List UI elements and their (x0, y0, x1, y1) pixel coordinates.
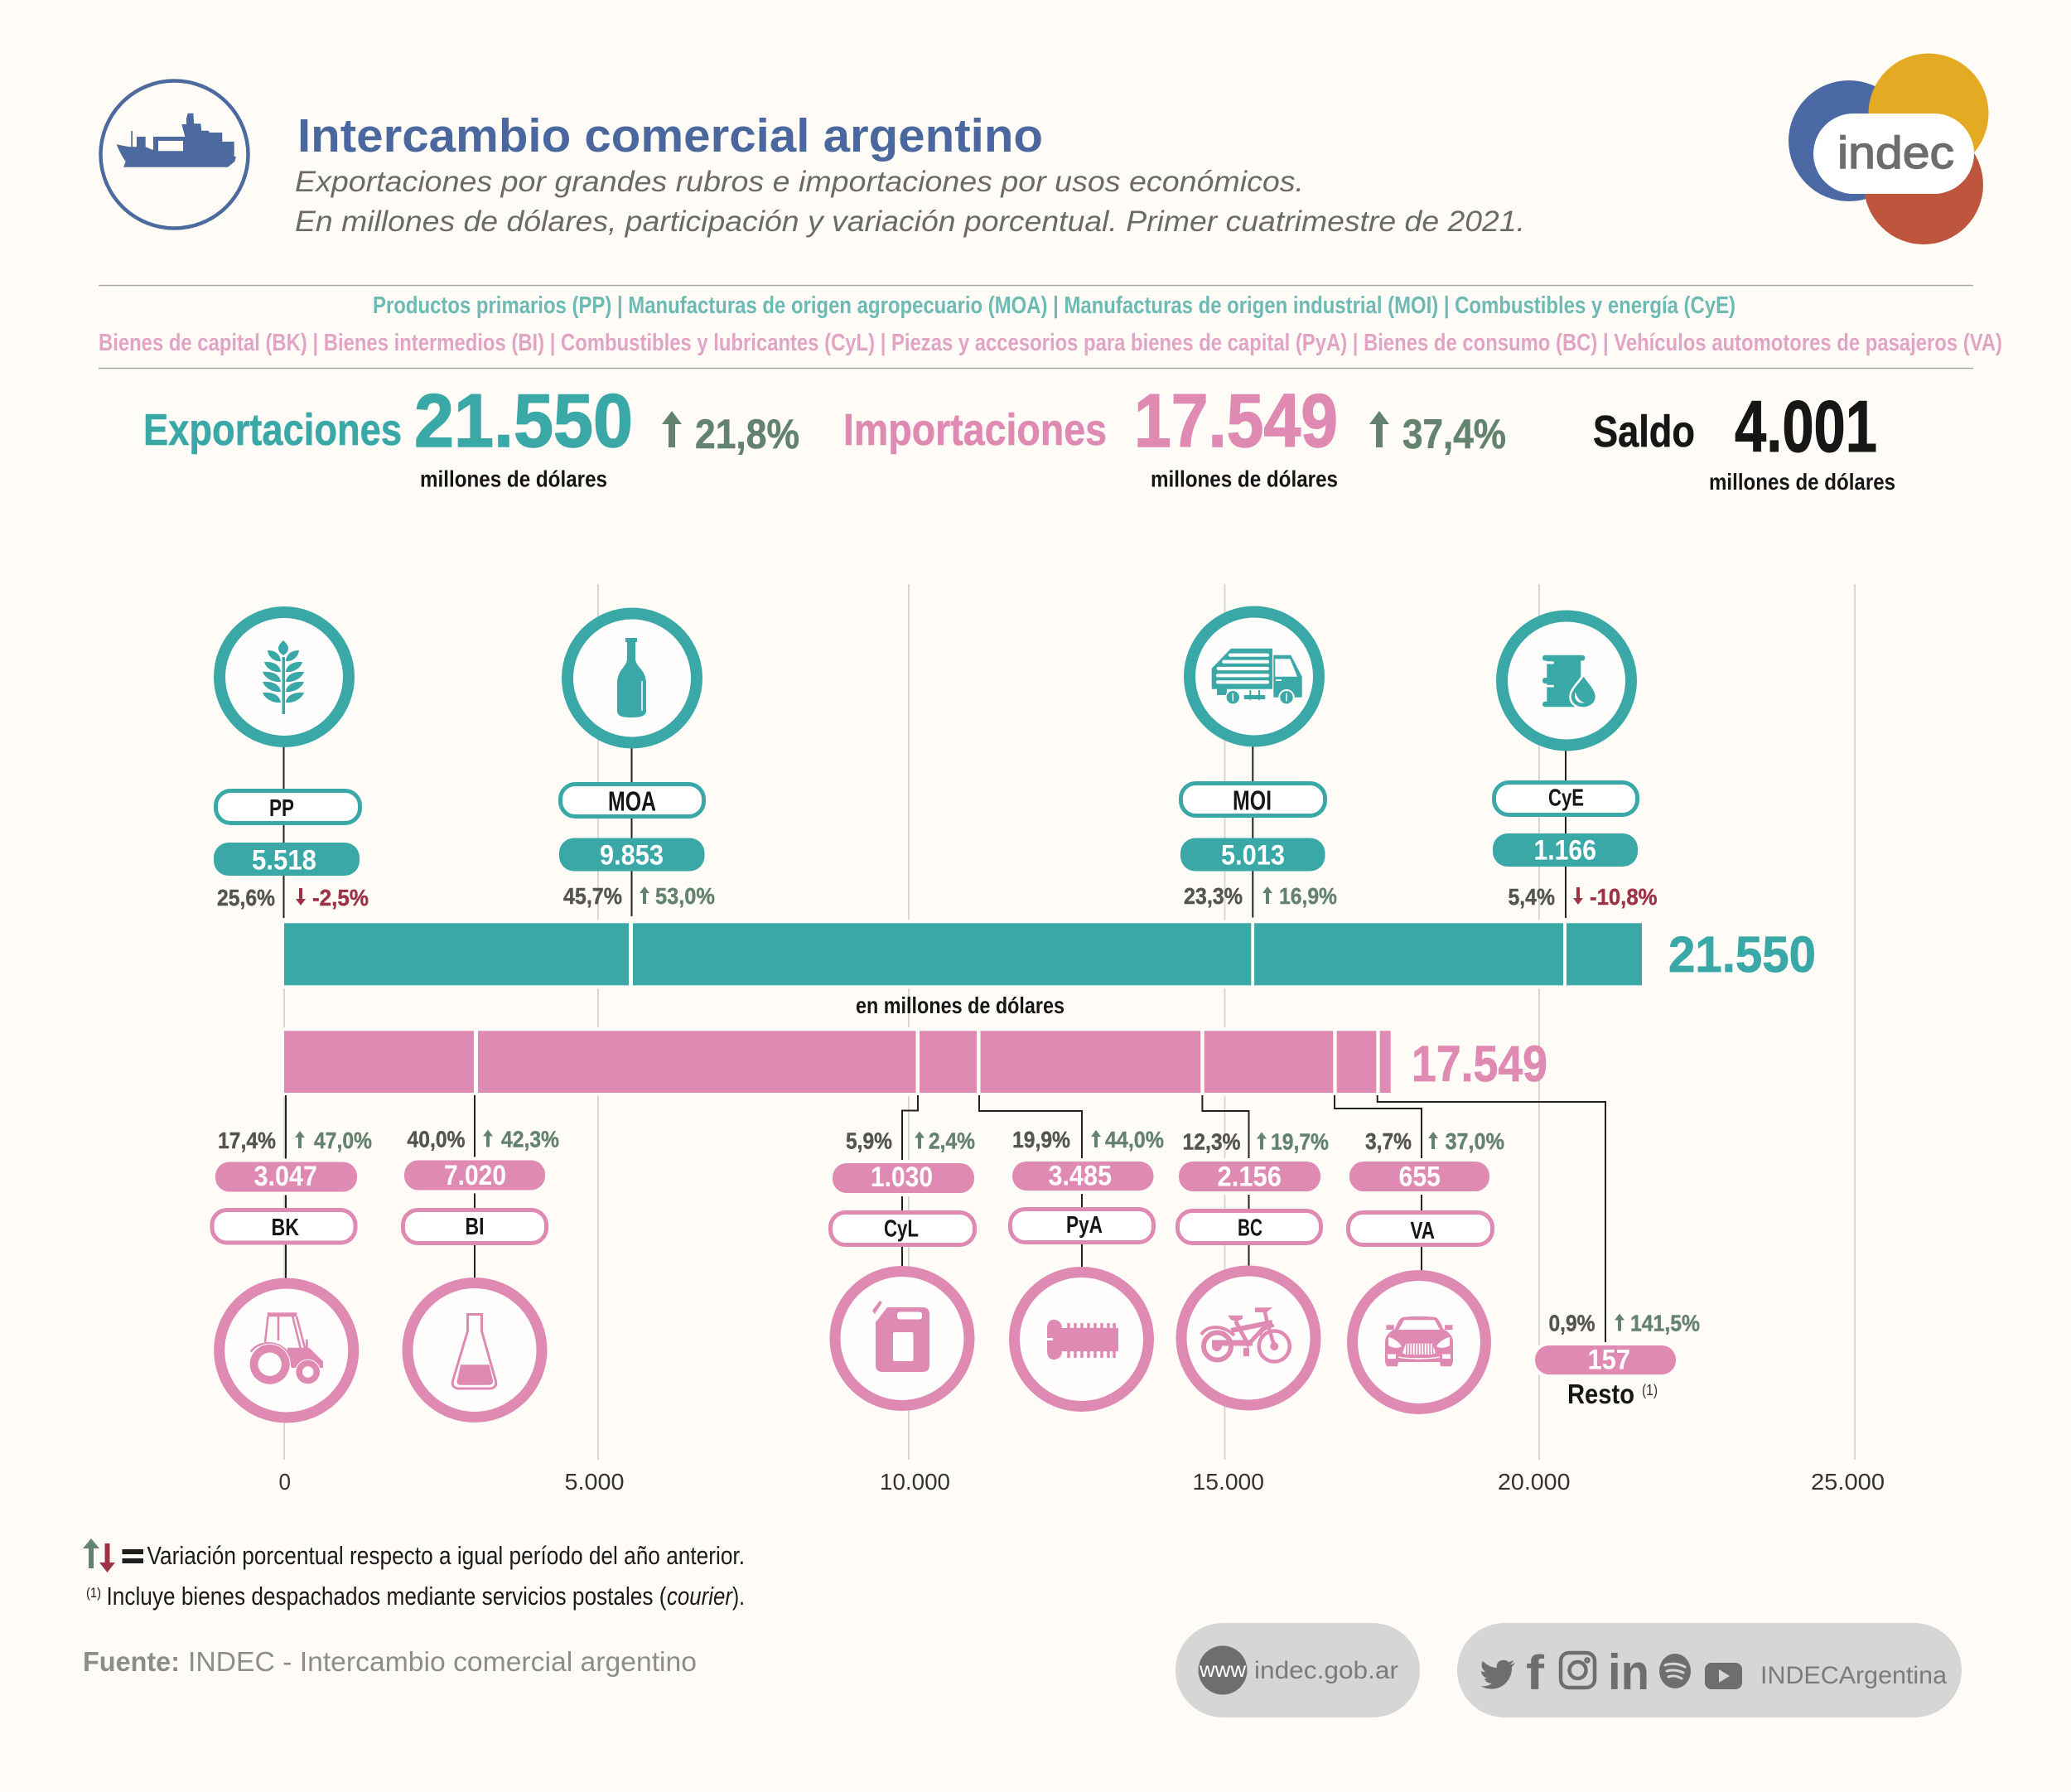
import item: BK: BK (272, 1215, 299, 1241)
label pill (1178, 1211, 1320, 1243)
summary: importaciones: 17.549 (1134, 379, 1338, 463)
bar label: 21.550: 21.550 (1668, 926, 1816, 983)
note: arrows legend (83, 1538, 745, 1572)
summary: exportaciones (143, 379, 799, 492)
summary: importaciones: millones de dólares (1151, 466, 1338, 492)
variation (295, 1128, 372, 1153)
icon: jerrycan (835, 1271, 969, 1405)
variation: 16,9% (1279, 883, 1337, 909)
bar: imports total (284, 1027, 1391, 1096)
bar: exports total (284, 920, 1642, 988)
value pill (1535, 1345, 1676, 1374)
variation: 19,7% (1271, 1128, 1329, 1155)
icon: truck (1190, 611, 1319, 741)
variation: 53,0% (655, 883, 715, 909)
chart: x axis labels: 0 (278, 1469, 291, 1495)
variation: -2,5% (312, 885, 369, 910)
import item: PyA: PyA (1066, 1212, 1103, 1239)
variation: 47,0% (314, 1128, 372, 1153)
import item: BI: BI (466, 1214, 484, 1240)
import item: VA (1335, 1095, 1504, 1408)
icon: instagram (1561, 1653, 1595, 1688)
import item: CyL (830, 1095, 975, 1405)
import item: PyA (979, 1095, 1164, 1407)
website pill: www (1199, 1657, 1246, 1682)
variation: 141,5% (1630, 1311, 1700, 1336)
icon: tractor (220, 1283, 354, 1418)
summary: saldo: Saldo (1593, 407, 1695, 456)
label pill (1181, 784, 1325, 815)
import item: BC: 2.156 (1218, 1162, 1282, 1193)
value pill (1493, 833, 1638, 867)
footnote marker: (1) (1642, 1382, 1658, 1398)
icon: facebook: f (1526, 1646, 1545, 1700)
label pill (215, 790, 360, 824)
share: 40,0% (408, 1127, 466, 1152)
export item: MOI: 5.013 (1221, 840, 1285, 872)
value pill (833, 1163, 974, 1193)
chart: x axis labels: 25.000 (1811, 1469, 1885, 1495)
export item: PP: 5.518 (252, 845, 316, 877)
logo: indec (1789, 53, 1988, 244)
export item: CyE (1493, 616, 1658, 918)
icon: bicycle (1181, 1271, 1315, 1405)
summary: exportaciones: Exportaciones (143, 405, 402, 455)
summary: saldo: 4.001 (1735, 385, 1877, 467)
icon: youtube (1705, 1663, 1742, 1689)
import item: CyL: 1.030 (871, 1162, 933, 1193)
icon: linkedin: in (1608, 1645, 1649, 1700)
label pill (560, 784, 704, 817)
export item: CyE: CyE (1548, 785, 1584, 812)
variation: 44,0% (1105, 1127, 1164, 1152)
header (101, 81, 1525, 238)
variation: 37,0% (1445, 1128, 1504, 1154)
export item: MOI (1180, 611, 1337, 918)
share: 12,3% (1183, 1128, 1241, 1155)
value pill (215, 1162, 357, 1191)
import item: BK: 3.047 (253, 1161, 317, 1192)
summary: exportaciones: 21,8% (695, 411, 799, 457)
summary: exportaciones: 21.550 (414, 379, 633, 463)
chart: x axis labels: 5.000 (565, 1469, 625, 1495)
share: 25,6% (217, 885, 275, 910)
note: courier footnote: (1) (86, 1585, 101, 1601)
icon: barrel and drop (1502, 616, 1631, 746)
label pill (1011, 1210, 1153, 1243)
import item: VA: VA (1410, 1218, 1435, 1244)
label pill (1494, 782, 1637, 815)
bar label: 17.549: 17.549 (1412, 1036, 1547, 1092)
export item: MOI: MOI (1233, 785, 1272, 815)
export item: PP (214, 612, 369, 918)
import item: BC (1178, 1095, 1329, 1405)
summary: importaciones: Importaciones (843, 405, 1107, 455)
share: 17,4% (218, 1128, 276, 1153)
summary: importaciones (843, 379, 1506, 492)
summary: importaciones: 37,4% (1402, 411, 1506, 457)
export item: MOA: MOA (608, 785, 656, 817)
icon: twitter (1480, 1660, 1515, 1689)
value pill (559, 838, 704, 872)
import item: VA: 655 (1398, 1162, 1441, 1193)
icon: screw (1014, 1273, 1148, 1407)
share: 23,3% (1184, 883, 1243, 909)
icon: flask (408, 1282, 542, 1417)
icon: car (1352, 1276, 1486, 1408)
variation: -10,8% (1590, 884, 1658, 910)
label pill (1349, 1213, 1493, 1244)
icon: ship in circle (101, 81, 249, 229)
icon: bottle (567, 613, 697, 742)
variation (915, 1128, 975, 1153)
handle: INDECArgentina (1760, 1662, 1947, 1689)
value pill (1349, 1162, 1489, 1191)
social pill (1457, 1623, 1962, 1717)
import item: Resto (1378, 1095, 1700, 1409)
import item: BI: 7.020 (444, 1160, 506, 1191)
legend: export categories: Productos primarios (PP) | Manufacturas de origen agropecuario (MOA) | Manufacturas de origen industrial (MOI) | Combustibles y energía (CyE) (373, 292, 1735, 319)
label pill (212, 1210, 355, 1243)
import item: BC: BC (1238, 1215, 1262, 1241)
share: 5,9% (846, 1128, 892, 1153)
summary: exportaciones: millones de dólares (420, 466, 607, 492)
export item: CyE: 1.166 (1534, 835, 1596, 867)
logo: indec: indec (1837, 127, 1954, 178)
export item: MOA: 9.853 (600, 840, 664, 872)
subtitle line 1: Exportaciones por grandes rubros e importaciones por usos económicos. (295, 166, 1304, 198)
chart: x axis labels (278, 1469, 1885, 1495)
value pill (1179, 1162, 1320, 1191)
summary: saldo: millones de dólares (1709, 469, 1895, 495)
value pill (1180, 838, 1325, 872)
source: Fuente: (83, 1646, 180, 1677)
subtitle line 2: En millones de dólares, participación y variación porcentual. Primer cuatrimestre de 2021. (295, 205, 1525, 238)
share: 5,4% (1508, 884, 1555, 910)
import item: BI (403, 1095, 559, 1417)
source: INDEC - Intercambio comercial argentino (188, 1646, 697, 1677)
import item: Resto: 157 (1587, 1344, 1630, 1375)
chart: grid lines (284, 584, 1855, 1460)
import item: PyA: 3.485 (1049, 1160, 1112, 1191)
share: 0,9% (1549, 1311, 1595, 1336)
export item: MOA (559, 613, 715, 916)
variation (483, 1127, 559, 1152)
website pill (1175, 1623, 1420, 1717)
chart: x axis labels: 10.000 (880, 1469, 950, 1495)
variation: 42,3% (501, 1127, 559, 1152)
note: courier footnote: courier (667, 1582, 733, 1611)
website pill: indec.gob.ar (1254, 1657, 1398, 1684)
title: Intercambio comercial argentino (297, 109, 1043, 162)
label pill (403, 1210, 547, 1243)
chart: x axis labels: 15.000 (1193, 1469, 1264, 1495)
icon: wheat (220, 612, 349, 741)
label pill (830, 1213, 974, 1244)
value pill (1012, 1162, 1153, 1191)
import item: CyL: CyL (884, 1216, 919, 1243)
share: 45,7% (563, 883, 622, 909)
chart: x axis labels: 20.000 (1498, 1469, 1571, 1495)
share: 19,9% (1012, 1127, 1070, 1152)
note: arrows legend: Variación porcentual respecto a igual período del año anterior. (147, 1541, 745, 1570)
note: courier footnote: Incluye bienes despachados mediante servicios postales ( (106, 1582, 667, 1611)
axis caption: en millones de dólares (856, 993, 1064, 1018)
export item: PP: PP (269, 795, 294, 822)
import item: BK (212, 1095, 372, 1418)
variation: 2,4% (929, 1128, 975, 1153)
label: Resto: Resto (1567, 1379, 1634, 1409)
icon: spotify (1659, 1654, 1691, 1688)
summary: saldo (1593, 385, 1895, 495)
value pill (404, 1160, 545, 1190)
value pill (214, 843, 360, 876)
note: courier footnote: ). (732, 1582, 745, 1611)
share: 3,7% (1365, 1128, 1412, 1154)
